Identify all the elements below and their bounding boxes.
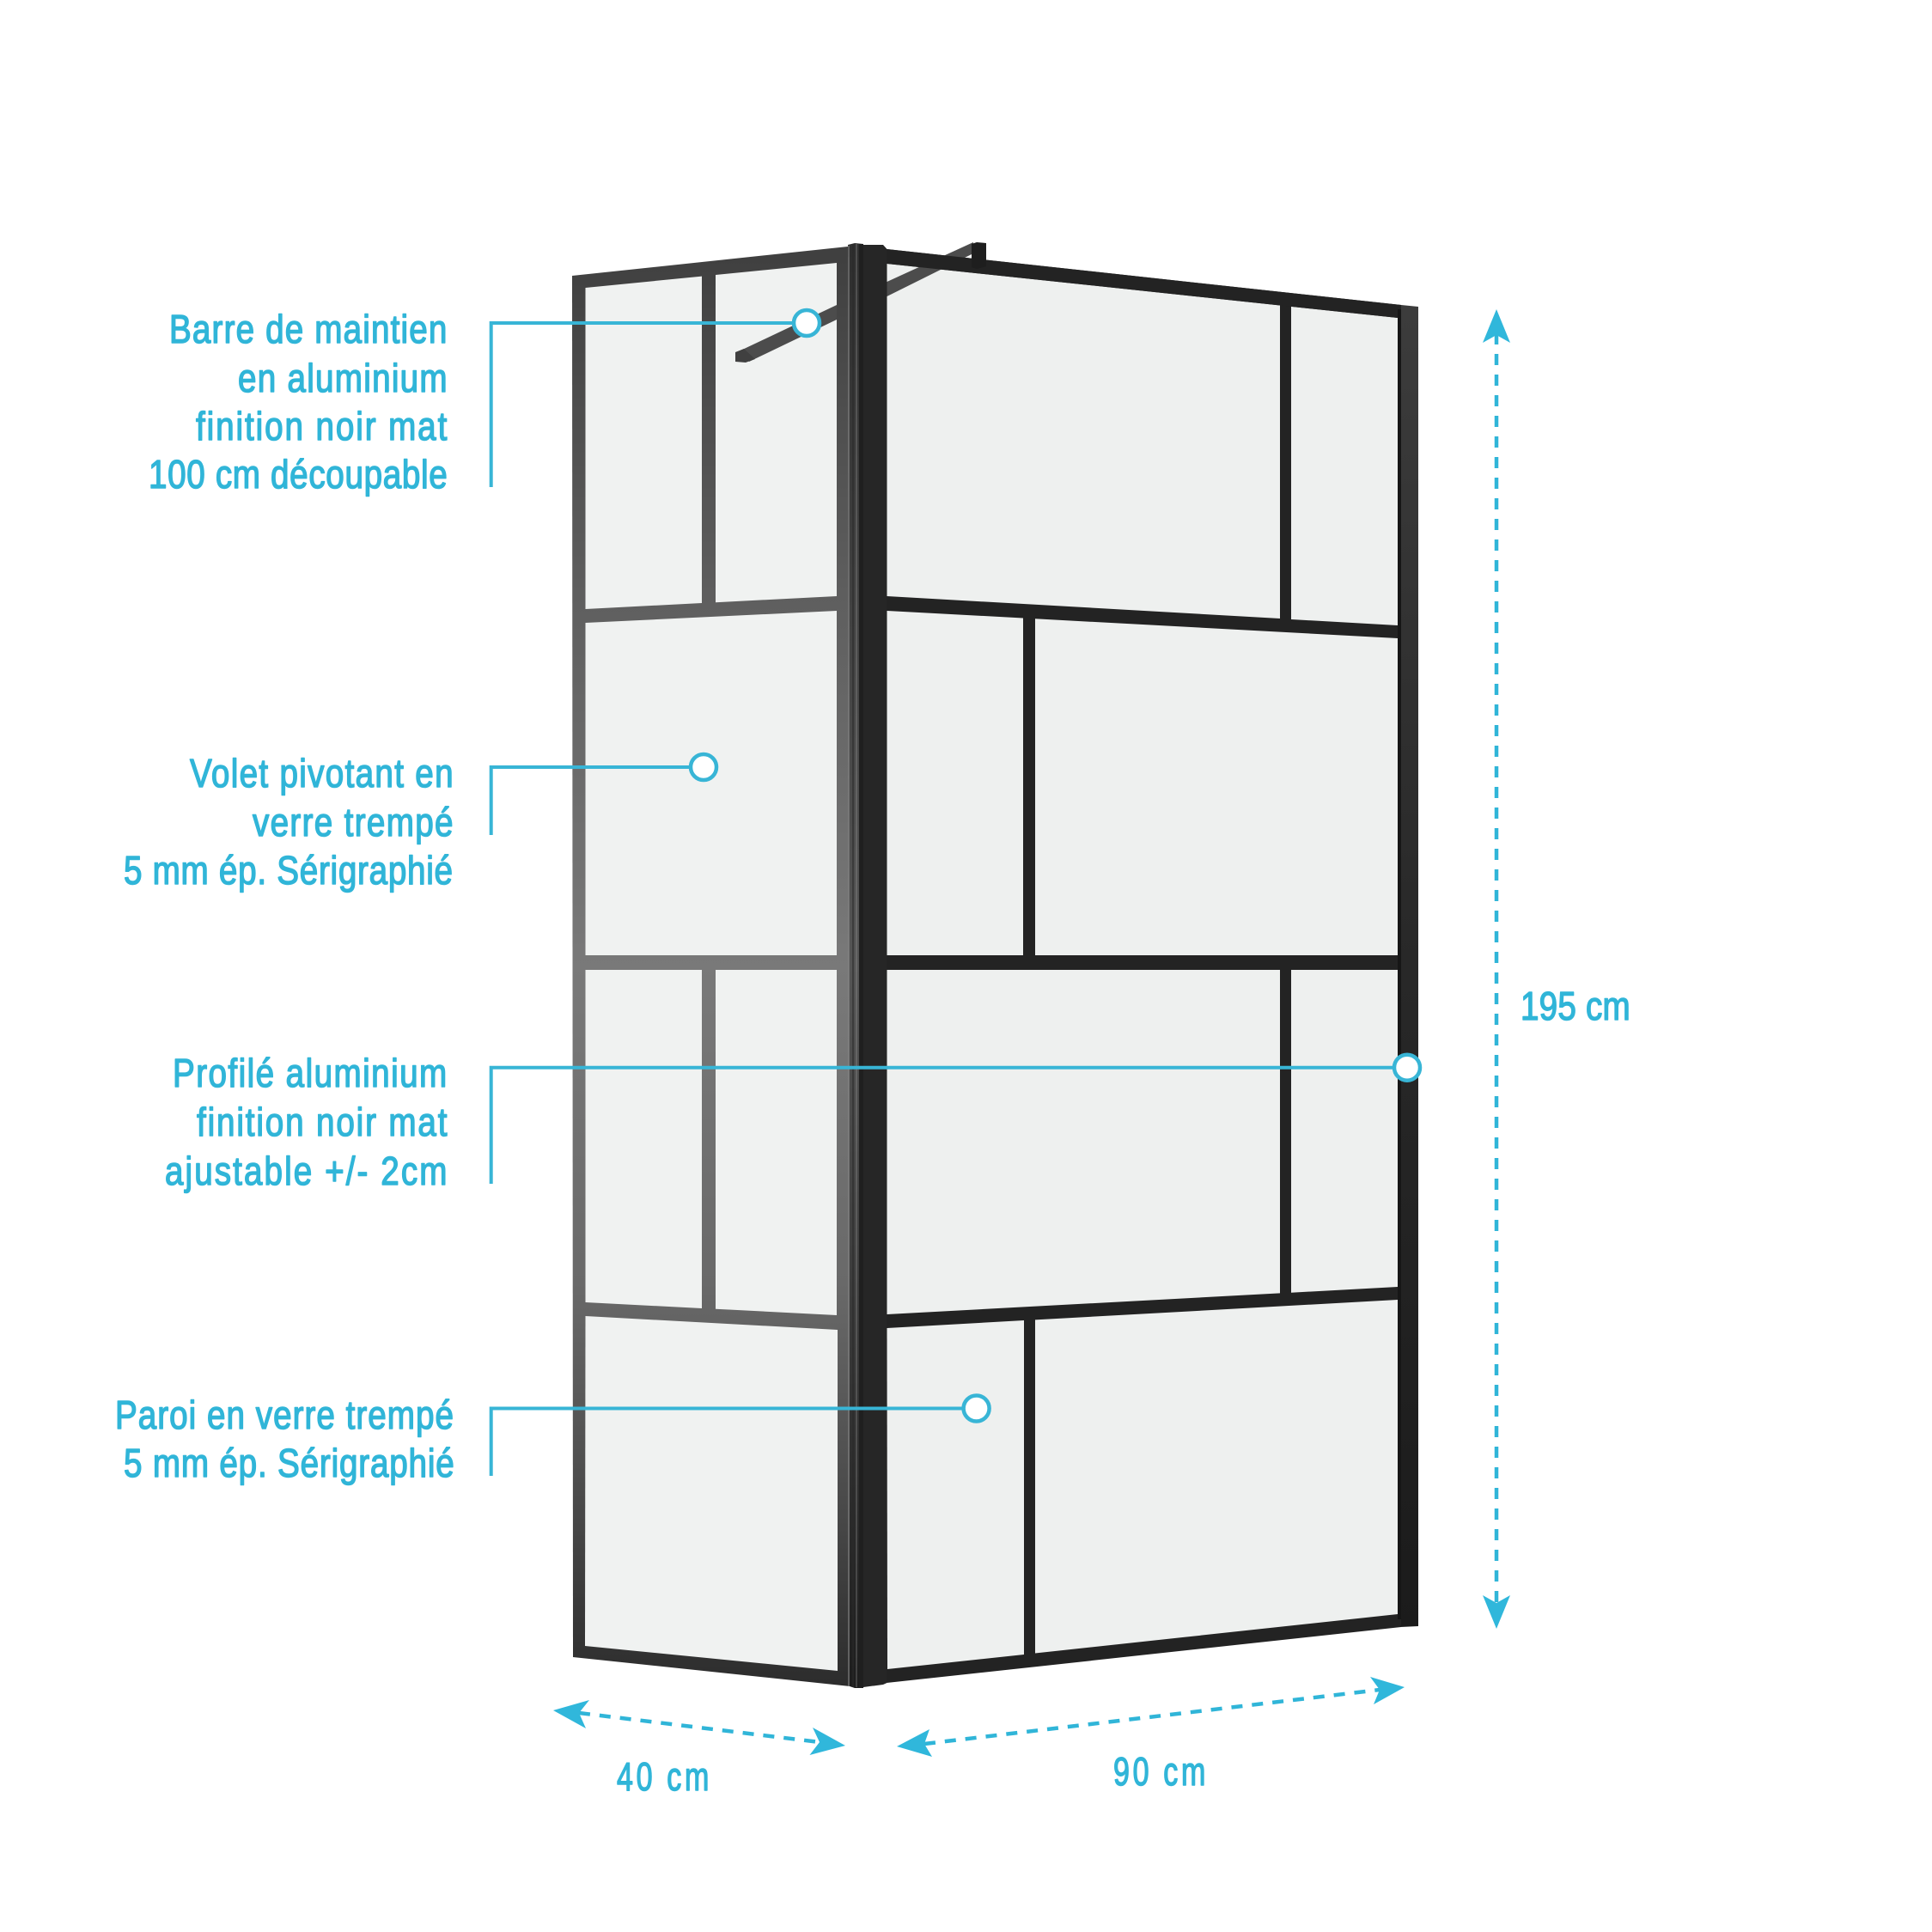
label text: Barre de maintien <box>169 308 447 351</box>
frame of side panel <box>572 247 850 1686</box>
label text: en aluminium <box>238 357 448 400</box>
marker <box>691 754 716 780</box>
label text <box>124 752 454 893</box>
dimension: width 90 cm <box>897 1677 1405 1794</box>
leader line <box>491 767 691 835</box>
label text: finition noir mat <box>196 405 447 448</box>
depth label: 40 cm <box>617 1754 709 1799</box>
callout: pivoting shutter <box>124 752 716 893</box>
label text <box>149 308 448 497</box>
panel: pivoting side glass panel <box>572 247 850 1686</box>
glass panes of front wall <box>887 264 1398 1669</box>
width label: 90 cm <box>1113 1749 1205 1794</box>
central black post <box>863 245 887 1687</box>
dimension: depth 40 cm <box>553 1700 845 1799</box>
callout: aluminium profile <box>165 1051 1420 1193</box>
dimension: height 195 cm <box>1483 309 1630 1629</box>
marker <box>1394 1055 1420 1081</box>
label text: 5 mm ép. Sérigraphié <box>124 1441 454 1485</box>
height label: 195 cm <box>1521 984 1630 1028</box>
leader line <box>491 1068 1394 1184</box>
label text: Profilé aluminium <box>173 1051 447 1095</box>
label text: Paroi en verre trempé <box>115 1393 454 1437</box>
frame of front wall <box>887 249 1401 1683</box>
panel: fixed front glass wall <box>887 242 1418 1683</box>
leader line <box>491 1409 964 1476</box>
arrow: width double arrow <box>897 1677 1405 1757</box>
leader line <box>491 323 794 487</box>
callout: glass wall <box>115 1393 990 1485</box>
label text <box>165 1051 448 1193</box>
label text: finition noir mat <box>197 1100 448 1144</box>
label text <box>115 1393 454 1485</box>
marker <box>794 310 820 336</box>
holding bar seen through side panel <box>735 305 837 363</box>
marker <box>964 1395 990 1421</box>
glass panes of side panel <box>585 263 838 1671</box>
holding bar behind front wall <box>887 242 973 296</box>
corner aluminium profile <box>848 243 863 1688</box>
label text: 100 cm découpable <box>149 453 448 497</box>
top rail of front wall <box>887 249 1401 318</box>
arrow: vertical double arrow <box>1483 309 1510 1629</box>
label text: ajustable +/- 2cm <box>165 1149 447 1193</box>
arrow: depth double arrow <box>553 1700 845 1755</box>
wall bracket of holding bar <box>972 242 986 269</box>
label text: Volet pivotant en <box>190 752 454 795</box>
callout: holding bar <box>149 308 820 497</box>
label text: verre trempé <box>253 801 454 844</box>
right wall profile <box>1398 305 1418 1627</box>
label text: 5 mm ép. Sérigraphié <box>124 849 453 893</box>
